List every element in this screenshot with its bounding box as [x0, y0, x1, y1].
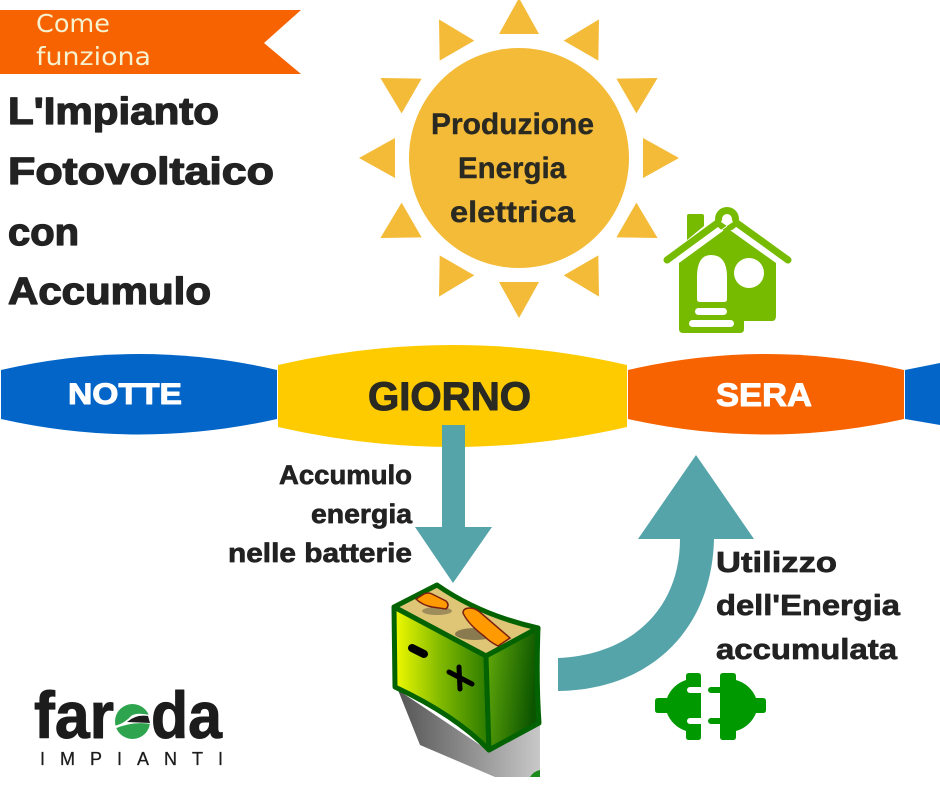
arrow: down to battery: [415, 425, 492, 583]
logo: Faroda Impianti: far: [34, 678, 114, 752]
timeline band: next night: [905, 363, 940, 425]
title: [8, 91, 274, 313]
arrow: curved up to evening: [558, 455, 754, 691]
timeline band: notte: NOTTE: [68, 378, 182, 411]
sun label: Produzione Energia elettrica: Produzione: [431, 108, 594, 141]
text: Accumulo energia nelle batterie: Accumulo: [279, 460, 412, 490]
timeline band: giorno: GIORNO: [368, 375, 531, 419]
icon: house: [667, 207, 788, 333]
logo: Faroda Impianti: da: [151, 678, 223, 752]
timeline band: sera: SERA: [716, 377, 812, 413]
icon: battery: [394, 585, 540, 777]
text: Accumulo energia nelle batterie: nelle batterie: [228, 538, 412, 568]
banner: Come funziona: funziona: [36, 42, 151, 71]
timeline band: giorno: [278, 345, 627, 447]
title: Accumulo: [8, 271, 211, 313]
timeline band: notte: [1, 354, 277, 434]
timeline band: sera: [628, 354, 904, 434]
text: Utilizzo dell'Energia accumulata: dell'Energia: [716, 590, 901, 622]
sun label: Produzione Energia elettrica: elettrica: [450, 196, 575, 229]
banner: Come funziona: Come: [36, 9, 110, 38]
title: L'Impianto: [8, 91, 219, 133]
icon: plug: [655, 673, 766, 740]
sun label: Produzione Energia elettrica: Energia: [458, 152, 566, 185]
title: con: [8, 212, 79, 254]
text: Utilizzo dell'Energia accumulata: Utilizzo: [716, 547, 837, 579]
text: Utilizzo dell'Energia accumulata: [716, 547, 901, 666]
sun label: Produzione Energia elettrica: [431, 108, 594, 229]
icon: sun: [359, 0, 679, 318]
logo: Faroda Impianti: IMPIANTI: [40, 749, 223, 769]
text: Accumulo energia nelle batterie: energia: [311, 499, 413, 529]
text: Utilizzo dell'Energia accumulata: accumulata: [716, 634, 898, 666]
logo: Faroda Impianti: [34, 678, 223, 769]
text: Accumulo energia nelle batterie: [228, 460, 413, 568]
banner: Come funziona: [0, 9, 301, 74]
title: Fotovoltaico: [8, 151, 274, 193]
